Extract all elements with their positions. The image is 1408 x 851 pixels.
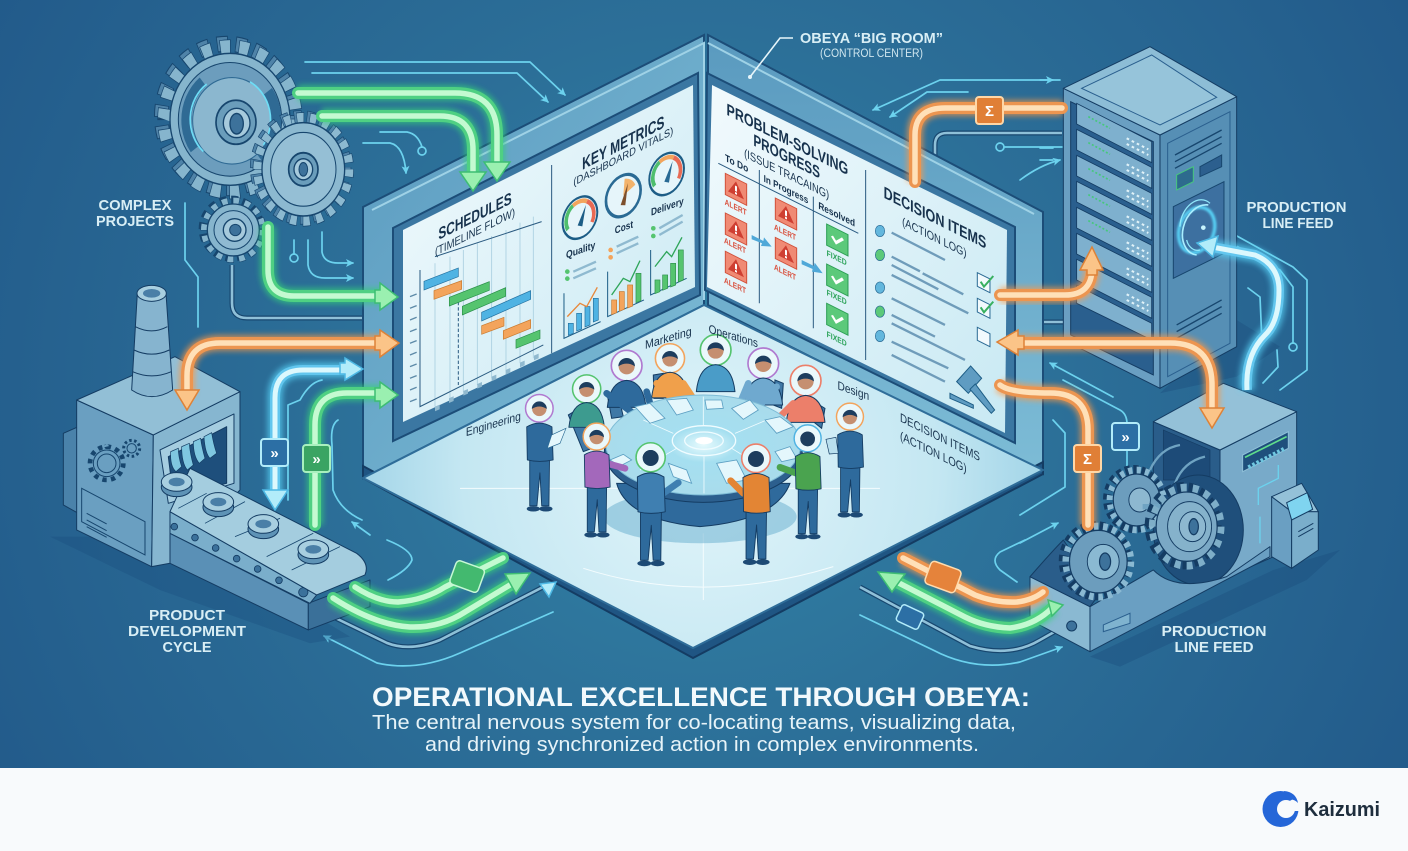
checkboxes: [977, 273, 990, 347]
room: right wall frame: [708, 35, 1043, 474]
table rim: [604, 401, 802, 502]
person: seated red: [786, 365, 825, 422]
rack side face: [1160, 97, 1237, 388]
room: floor: [363, 305, 1043, 648]
room: left wall frame: [363, 35, 704, 478]
alert captions: ALERT: [724, 275, 746, 296]
heading: key metrics: (DASHBOARD VITALS): [573, 125, 673, 189]
divider: [550, 165, 553, 353]
department labels: Design: [837, 378, 869, 403]
gauge labels: [566, 196, 684, 261]
arrow: orange server to problem solving: [915, 97, 1062, 182]
arrow: green from gears to schedules: [298, 93, 510, 181]
chart: cost trend: [608, 261, 644, 317]
status lights: [1088, 117, 1110, 232]
label: production line feed, server: LINE FEED: [1262, 215, 1334, 232]
heading: schedules: (TIMELINE FLOW): [435, 205, 515, 259]
factory top face: [77, 357, 240, 435]
room: platform edge: [363, 462, 1043, 658]
heading: decision items: (ACTION LOG): [902, 214, 966, 260]
heading: problem-solving progress: (ISSUE TRACAING): [744, 145, 829, 202]
trough body: [1030, 577, 1090, 652]
gauge labels: Quality: [566, 239, 595, 261]
thin cyan flow lines: [185, 62, 1307, 666]
gears: complex projects: [161, 44, 348, 259]
arms on table: [607, 383, 793, 418]
rack front face: [1063, 88, 1160, 388]
icon: small gear: [203, 200, 262, 259]
table top: [606, 395, 801, 495]
person: purple shirt: [583, 423, 625, 538]
upper block opening: [1153, 422, 1220, 497]
arrow: orange server to problem solving: Σ: [985, 103, 994, 120]
person: design: [826, 403, 863, 518]
rack top face: [1063, 47, 1237, 135]
factory right face: [152, 392, 240, 567]
chart: gantt timeline: [410, 217, 543, 411]
arrow: green second gear link: [322, 116, 486, 191]
icon: blue flow tag: [1112, 423, 1139, 450]
dark conduit pipes: [232, 133, 1120, 651]
resolved captions: FIXED: [827, 329, 847, 349]
label: complex projects: COMPLEX: [98, 197, 172, 214]
machine: production line: [1030, 383, 1340, 667]
kiosk: [1272, 483, 1318, 568]
heading: problem-solving progress: PROBLEM-SOLVING: [726, 99, 848, 179]
department labels: Engineering: [466, 409, 521, 439]
conveyor base: [170, 533, 308, 630]
machine: server rack: [1063, 47, 1280, 393]
icon: blue flow tag: »: [1121, 429, 1130, 446]
gauge: delivery: [649, 148, 684, 200]
person: seated purple: [607, 350, 646, 407]
heading: problem-solving progress: PROGRESS: [753, 130, 820, 182]
alert captions: ALERT: [774, 262, 796, 283]
alert captions: ALERT: [725, 197, 747, 218]
icon: large gear: [161, 44, 296, 192]
screen bezel: [393, 73, 700, 441]
label: product development cycle: [128, 607, 246, 656]
label: production line feed, machine: PRODUCTION: [1162, 623, 1266, 640]
icon: wave mark: [1262, 791, 1300, 827]
chart: delivery trend: [651, 237, 687, 295]
label: production line feed, server: [1246, 199, 1346, 232]
arrow: blue feed to conveyor: »: [270, 445, 279, 462]
machine: factory and conveyor: [50, 285, 370, 643]
alert captions: ALERT: [774, 222, 796, 243]
resolved captions: [827, 248, 847, 349]
legends: [573, 215, 683, 278]
wordmark: Kaizumi: [1304, 799, 1380, 821]
panel: left screen: [393, 73, 700, 441]
cable socket: [1067, 621, 1077, 631]
logo: kaizumi: [1262, 791, 1380, 827]
nameplate: [82, 488, 145, 555]
label: production line feed, server: PRODUCTION: [1246, 199, 1346, 216]
gear engraving: [90, 440, 140, 480]
person: seated blond: [744, 348, 783, 405]
person: green shirt: [780, 425, 821, 539]
conveyor side rail: [170, 512, 317, 603]
arrow: blue feed to conveyor: [261, 358, 363, 510]
glowing port: [1172, 200, 1221, 258]
product discs: [161, 473, 329, 564]
arrow: orange decision to production: [997, 330, 1224, 428]
icon: gavel: [950, 366, 995, 413]
department labels: Operations: [709, 322, 758, 350]
title: OPERATIONAL EXCELLENCE THROUGH OBEYA:: [372, 682, 1030, 712]
column headers: Resolved: [818, 200, 855, 230]
footer band: [0, 768, 1408, 851]
panel: right screen: [705, 73, 1015, 443]
upper block front: [1220, 412, 1297, 580]
column headers: [725, 152, 855, 230]
person: seated green: [569, 375, 604, 427]
ground shadow: [50, 537, 350, 643]
seated team members: [568, 335, 825, 452]
person: seated orange: [652, 344, 688, 398]
chairs: [568, 373, 825, 452]
chimney: [132, 285, 173, 397]
heading: key metrics: KEY METRICS: [582, 111, 664, 174]
arrow: green conveyor to room with icon: [303, 382, 398, 525]
alert captions: ALERT: [724, 235, 746, 256]
resolved tickets: [827, 224, 848, 335]
label: product development cycle: DEVELOPMENT: [128, 623, 246, 640]
person: blue shirt, facing table: [636, 443, 678, 566]
kanban grid: [718, 163, 866, 360]
gauge labels: Delivery: [651, 196, 684, 219]
arrow: blue production to server: [1197, 236, 1279, 390]
table shadow: [603, 490, 797, 543]
papers on table: [610, 398, 797, 483]
label: production line feed, machine: [1162, 623, 1266, 656]
resolved captions: FIXED: [827, 287, 847, 307]
label: complex projects: [96, 197, 174, 230]
gear: front large: [1149, 487, 1220, 565]
icon: medium gear: [256, 117, 348, 220]
person: orange shirt, facing table: [731, 444, 770, 565]
screen face: [707, 85, 1007, 433]
action log bullets: [875, 225, 885, 342]
action log lines: [892, 233, 968, 382]
conveyor belt: [170, 468, 366, 595]
arrow: orange decision down to gears: Σ: [1083, 451, 1092, 468]
column headers: To Do: [725, 152, 749, 176]
floor label: decision items: DECISION ITEMS: [900, 410, 980, 464]
person: seated lead: [696, 335, 735, 392]
gear: lower left: [1063, 526, 1130, 596]
opening and slats: [160, 414, 234, 503]
upper block top: [1153, 383, 1297, 450]
arrow: green and orange return from production: [878, 558, 1063, 630]
progress arrows: [752, 235, 823, 273]
table pedestal: [617, 483, 790, 527]
arrow: green with tag: [355, 558, 503, 602]
screen face: [403, 85, 695, 422]
floor grid: [460, 488, 880, 600]
shadow: [1090, 550, 1340, 667]
column headers: In Progress: [764, 173, 808, 207]
gauge: quality: [563, 192, 597, 244]
resolved captions: FIXED: [827, 248, 847, 268]
department labels: Marketing: [645, 324, 692, 352]
floor label: decision items: (ACTION LOG): [900, 428, 967, 476]
screen bezel: [705, 73, 1015, 443]
arrow: orange decision to server: [1000, 247, 1103, 295]
gear: upper: [1107, 470, 1163, 529]
gauge labels: Cost: [615, 219, 633, 237]
gauge: cost: [606, 170, 641, 222]
arrow: green small gear to schedules: [268, 227, 398, 310]
room: top frame highlight: [372, 43, 1034, 300]
label: production line feed, machine: LINE FEED: [1174, 639, 1254, 656]
heading: schedules: SCHEDULES: [438, 188, 512, 244]
callout: obeya big room: (CONTROL CENTER): [820, 48, 923, 60]
room: floor and table scene: [460, 322, 880, 600]
standing team members: [526, 395, 863, 566]
rack units: [1077, 103, 1152, 340]
label: complex projects: PROJECTS: [96, 213, 174, 230]
arrow: cyan tail on lower pipe: [540, 582, 556, 597]
arrow: orange decision down to gears: [1000, 385, 1101, 525]
arrow: green conveyor to room with icon: »: [312, 451, 321, 468]
display strip: [1243, 432, 1288, 472]
department labels: [466, 322, 869, 439]
alerts: [725, 173, 797, 283]
person: engineering: [526, 395, 566, 512]
arrow: orange production to factory and schedules: [175, 330, 399, 410]
subtitle: and driving synchronized action in complex environments.: [425, 734, 979, 756]
callout: obeya big room: [748, 30, 943, 79]
subtitle: The central nervous system for co-locating teams, visualizing data,: [372, 712, 1016, 734]
heading: decision items: DECISION ITEMS: [884, 183, 986, 253]
dark housing disc: [1153, 475, 1243, 585]
holographic display: [640, 397, 767, 493]
alert captions: [724, 197, 796, 296]
heading: decision items: [884, 183, 986, 260]
subtitle: [372, 712, 1016, 756]
side vents and panel: [1175, 130, 1222, 338]
factory left face: [77, 400, 153, 567]
label: product development cycle: PRODUCT: [149, 607, 225, 624]
chart: quality trend: [564, 287, 601, 338]
floor shadow: [1160, 320, 1280, 393]
arrow: green from conveyor lower: [333, 573, 530, 627]
label: product development cycle: CYCLE: [162, 639, 212, 656]
callout: obeya big room: OBEYA “BIG ROOM”: [800, 30, 943, 47]
back plate: [63, 427, 78, 513]
